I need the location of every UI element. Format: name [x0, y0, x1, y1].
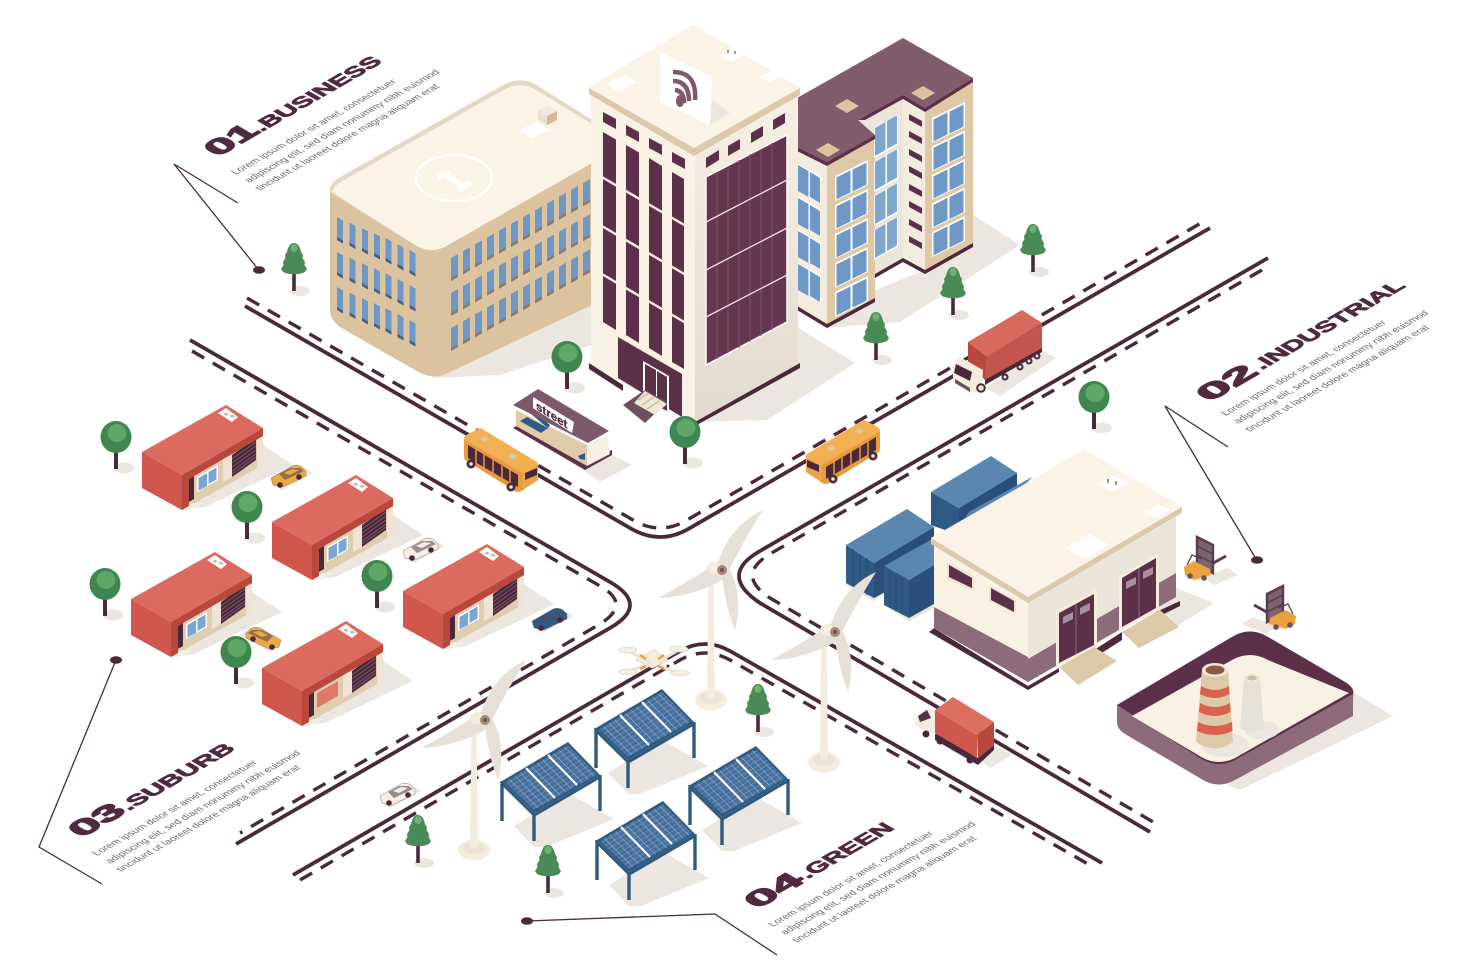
callout line: suburb — [39, 656, 122, 884]
callout line: green — [521, 914, 777, 955]
heading: 01 business: 01 — [196, 119, 267, 161]
heading: 02 industrial — [1188, 278, 1411, 406]
truck: lower road — [916, 697, 1012, 768]
bench — [520, 412, 585, 460]
body text: 03 suburb: tincidunt ut laoreet dolore magna aliquam erat — [114, 764, 304, 874]
solar panels — [502, 689, 802, 906]
truck: top road — [953, 310, 1056, 396]
curtain wall: tower glass facade — [706, 135, 787, 365]
windows: office right side — [451, 179, 590, 351]
containers — [846, 456, 1032, 621]
windows: apartment recess — [874, 115, 898, 260]
road: industrial edge — [739, 258, 1268, 832]
body text: 02 industrial: tincidunt ut laoreet dolore magna aliquam erat — [1243, 324, 1433, 434]
cooling tower: small — [1240, 674, 1279, 739]
chimney: striped — [1196, 663, 1249, 757]
building: central tower — [589, 25, 855, 426]
sign: street: street — [536, 399, 567, 432]
door: warehouse left — [1056, 589, 1097, 667]
billboard: tower logo — [660, 52, 712, 125]
windows: warehouse — [947, 562, 1016, 614]
bus stop — [513, 389, 632, 482]
roof: warehouse — [931, 450, 1182, 603]
heading: 02 industrial: 02 — [1188, 360, 1266, 406]
bus: left road — [464, 428, 538, 492]
roof: apartment — [797, 38, 973, 166]
body text: 04 green: adipiscing elit, sed diam nonummy nibh euismod — [778, 820, 979, 937]
body text: 04 green: Lorem ipsum dolor sit amet, consectetuer — [766, 830, 937, 929]
road: green edge — [293, 644, 1102, 880]
heading: 04 green: 04 — [736, 868, 813, 913]
windows: apartment front wing — [835, 160, 868, 317]
houses: suburb — [131, 405, 554, 726]
heading: 04 green — [736, 820, 900, 913]
drone — [619, 646, 689, 676]
bus: right road — [806, 420, 880, 484]
heading: 02 industrial: .INDUSTRIAL — [1247, 278, 1411, 373]
cars — [240, 465, 573, 808]
body text: 03 suburb: adipiscing elit, sed diam nonummy nibh euismod — [103, 749, 304, 866]
trees: business district — [281, 224, 1112, 468]
text block: 04 green — [736, 820, 980, 945]
road: suburb edge — [190, 340, 630, 844]
trees: green zone — [405, 684, 774, 898]
building: apartment block — [797, 38, 1020, 328]
roof: bus stop — [513, 389, 609, 443]
body text: 02 industrial: Lorem ipsum dolor sit amet, consectetuer — [1219, 319, 1390, 418]
text block: 01 business — [196, 53, 443, 193]
building: warehouse — [929, 450, 1214, 690]
container: left — [846, 509, 934, 601]
roof: office — [330, 80, 592, 250]
building: helipad office — [330, 80, 592, 378]
windows: tower top row left — [603, 112, 685, 169]
forklift: lower — [1242, 586, 1296, 634]
roof: tower — [589, 25, 800, 156]
windows: apartment left wing — [797, 163, 821, 303]
body text: 01 business: Lorem ipsum dolor sit amet, consectetuer — [229, 78, 400, 177]
text block: 02 industrial — [1188, 278, 1433, 434]
trees: suburb — [90, 421, 395, 688]
windows: apartment right wing — [932, 102, 965, 257]
heading: 03 suburb — [60, 740, 241, 842]
windows: office left side — [337, 217, 416, 346]
heading: 01 business: .BUSINESS — [247, 53, 388, 135]
container: back — [931, 456, 1032, 535]
heading: 01 business — [196, 53, 388, 161]
wind turbine: left — [421, 660, 526, 860]
container: front — [884, 538, 934, 621]
forklift: upper — [1184, 537, 1238, 585]
body text: 01 business: adipiscing elit, sed diam nonummy nibh euismod — [242, 68, 443, 185]
door: warehouse right — [1119, 553, 1159, 631]
body text: 03 suburb: Lorem ipsum dolor sit amet, consectetuer — [90, 759, 261, 858]
heading: 03 suburb: 03 — [60, 799, 134, 842]
truck cab — [953, 357, 985, 393]
wind turbine: right — [771, 572, 876, 772]
body text: 02 industrial: adipiscing elit, sed diam nonummy nibh euismod — [1231, 309, 1432, 426]
windows: tower left columns — [600, 132, 686, 369]
road network — [190, 219, 1268, 880]
text block: 03 suburb — [60, 740, 304, 874]
ramps: warehouse — [1059, 610, 1179, 685]
road: business north edge — [245, 219, 1210, 537]
callout line: business — [174, 164, 265, 274]
heading: 03 suburb: .SUBURB — [114, 740, 241, 814]
body text: 04 green: tincidunt ut laoreet dolore magna aliquam erat — [790, 835, 980, 945]
windows: tower top row right — [706, 113, 785, 168]
power plant enclosure — [1117, 632, 1393, 790]
body text: 01 business: tincidunt ut laoreet dolore magna aliquam erat — [253, 83, 443, 193]
windows: apartment stairwell — [909, 114, 922, 249]
heading: 04 green: .GREEN — [793, 820, 900, 882]
icon: helipad marking — [416, 155, 492, 201]
callout line: industrial — [1165, 406, 1263, 564]
wind turbine: center — [658, 510, 763, 710]
entrance: tower doors — [618, 337, 682, 423]
